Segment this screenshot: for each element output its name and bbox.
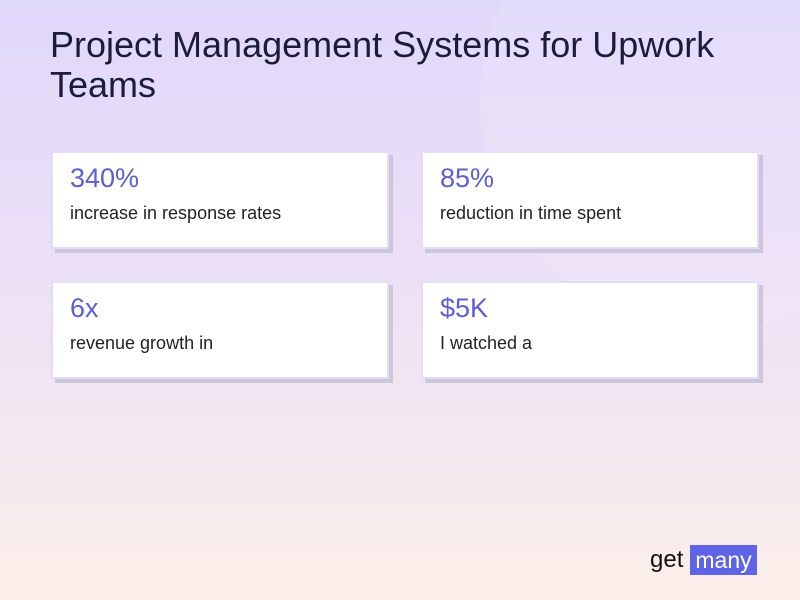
- logo: many: [695, 547, 752, 573]
- card: 85%: [421, 151, 759, 249]
- card: $5K: I watched a: [440, 333, 532, 353]
- logo: get: [650, 546, 683, 573]
- card: 6x: revenue growth in: [70, 333, 213, 353]
- card: 340%: 340%: [70, 163, 139, 193]
- card: 340%: [51, 151, 389, 249]
- card: 6x: [51, 281, 389, 379]
- title: Project Management Systems for Upwork Teams: [50, 24, 714, 105]
- card: $5K: $5K: [440, 293, 488, 323]
- card: 85%: 85%: [440, 163, 494, 193]
- card: 85%: reduction in time spent: [440, 203, 621, 223]
- logo: [650, 545, 757, 575]
- card: 340%: increase in response rates: [70, 203, 281, 223]
- card: 6x: 6x: [70, 293, 99, 323]
- card: $5K: [421, 281, 759, 379]
